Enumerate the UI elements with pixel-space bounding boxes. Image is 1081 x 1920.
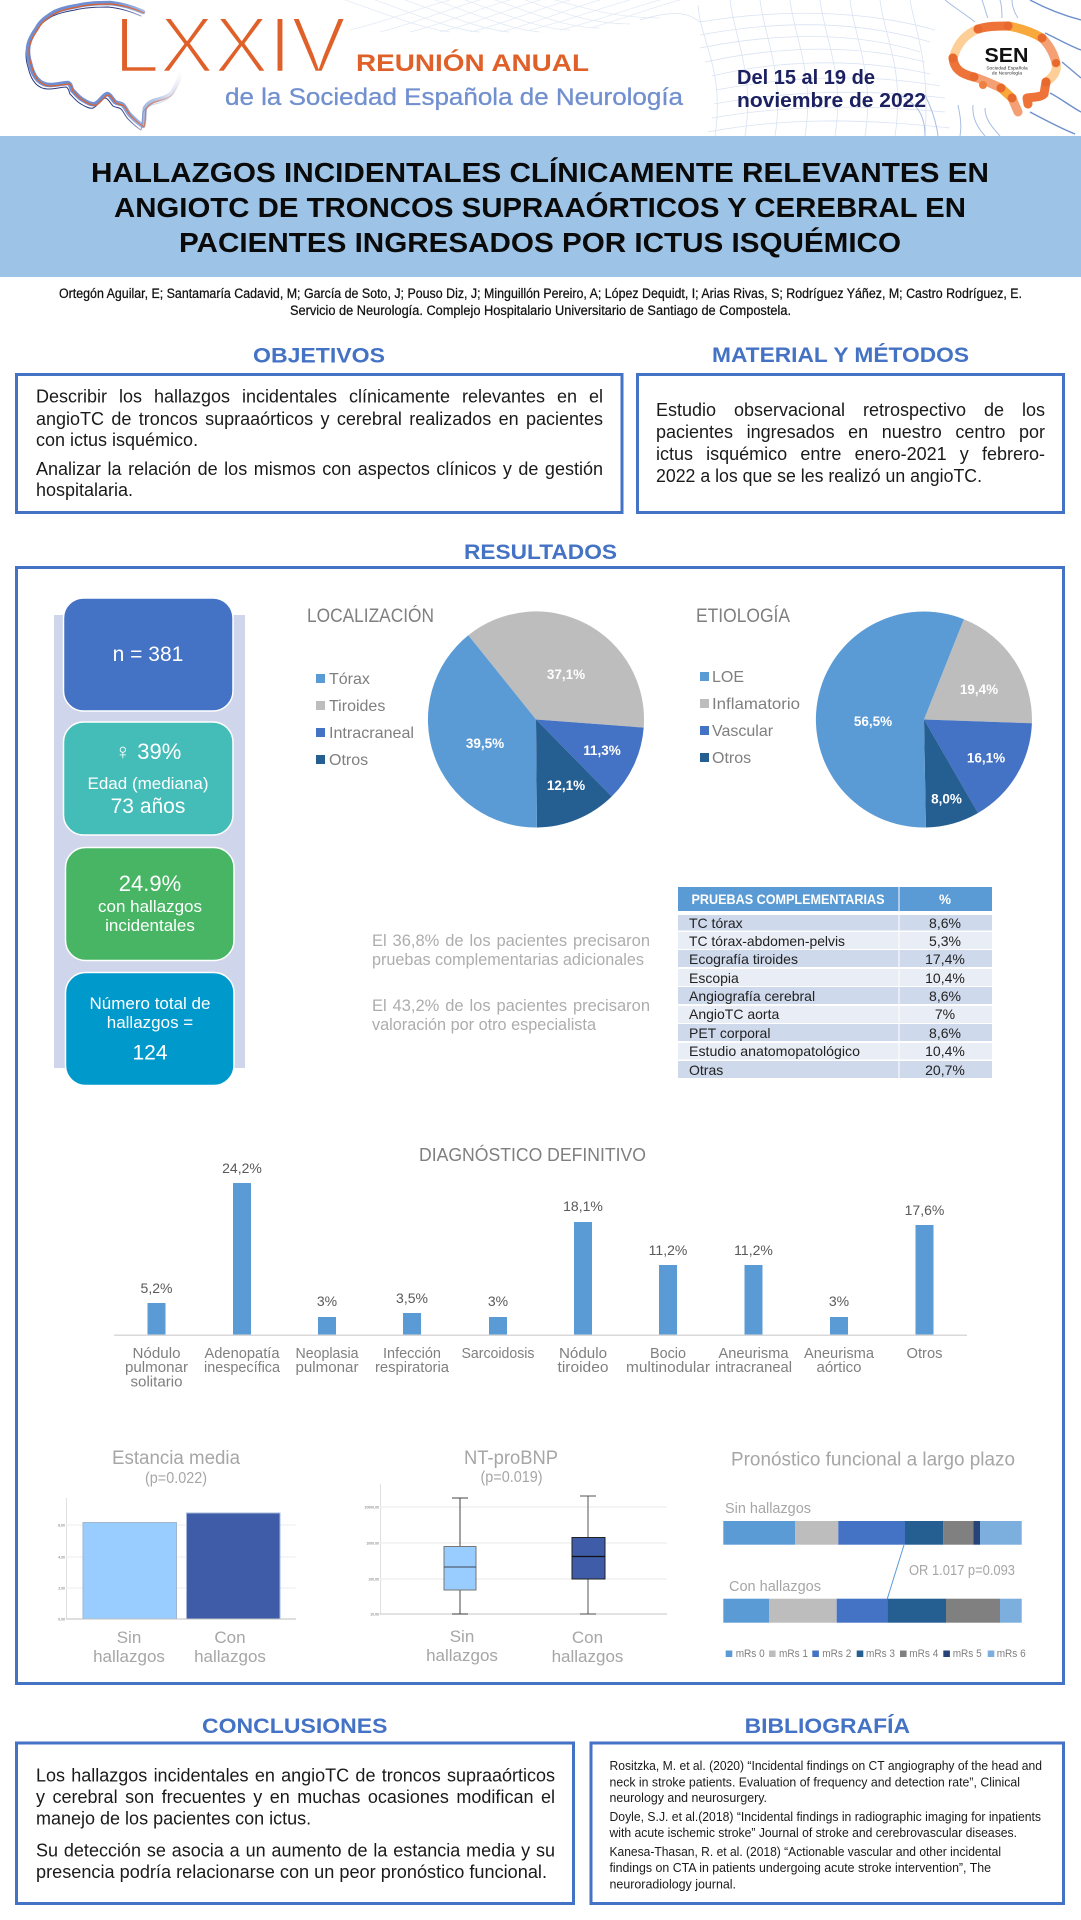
table: pruebas complementarias: Angiografía cerebral [689, 988, 815, 1004]
panel: conclusiones [16, 1743, 574, 1904]
legend: LOE [712, 669, 744, 686]
card: incidental findings rate: con hallazgos [98, 897, 202, 916]
text block: additional tests and specialist: El 43,2% de los pacientes precisaron [372, 997, 650, 1015]
category labels [93, 1628, 266, 1666]
odds ratio note: OR 1.017 p=0.093 [909, 1562, 1015, 1579]
bar category labels: Bocio [650, 1345, 686, 1362]
chart title: NT-proBNP [464, 1448, 558, 1469]
table: pruebas complementarias: TC tórax-abdomen-pelvis [689, 933, 845, 949]
bar category labels: Adenopatía [204, 1345, 280, 1362]
panel: material y métodos: ictus isquémico entre enero-2021 y febrero- [656, 444, 1045, 464]
panel: resultados [16, 568, 1064, 1684]
bar values: 18,1% [563, 1198, 603, 1214]
panel: material y métodos: Estudio observacional retrospectivo de los [656, 400, 1045, 420]
table: pruebas complementarias: AngioTC aorta [689, 1006, 779, 1022]
header banner: de Neurología [992, 70, 1022, 76]
pie values: 56,5% [854, 714, 892, 729]
chart title: LOCALIZACIÓN [307, 605, 434, 627]
legend [700, 669, 800, 767]
connector line [887, 1545, 904, 1599]
legend: Vascular [712, 723, 774, 740]
panel: bibliografía: neurology and neurosurgery. [610, 1790, 767, 1805]
panel: material y métodos: 2022 a los que se les realizó un angioTC. [656, 466, 982, 486]
card: incidental findings rate [66, 848, 234, 960]
table: pruebas complementarias: 7% [935, 1006, 955, 1022]
bar category labels: multinodular [626, 1359, 710, 1376]
bar category labels: Aneurisma [804, 1345, 875, 1362]
category labels [426, 1627, 623, 1666]
bar: con hallazgos [186, 1513, 280, 1619]
table: pruebas complementarias: 10,4% [925, 970, 965, 986]
table: pruebas complementarias: Escopia [689, 970, 739, 986]
bar category labels [125, 1345, 942, 1390]
bar values: 17,6% [905, 1202, 944, 1218]
summary cards column [54, 598, 245, 1086]
row label: con hallazgos: Con hallazgos [729, 1578, 821, 1595]
card: sex and age: ♀ 39% [115, 739, 181, 764]
bar values: 5,2% [141, 1280, 172, 1296]
heading: objetivos: OBJETIVOS [253, 344, 385, 368]
legend: Inflamatorio [712, 696, 800, 713]
authors and affiliation: Ortegón Aguilar, E; Santamaría Cadavid, M; García de Soto, J; Pouso Diz, J; Minguillón Pereiro, A; López Dequidt, I; Arias Rivas, S; Rodríguez Yáñez, M; Castro Rodríguez, E. [59, 286, 1022, 301]
bar category labels: Otros [906, 1345, 942, 1362]
chart: NT-proBNP box plot: 10000,00 [364, 1506, 379, 1510]
category labels: Con [214, 1628, 246, 1647]
bar category labels: Nódulo [132, 1345, 180, 1362]
pie values: 11,3% [583, 743, 621, 758]
category labels: Con [572, 1628, 603, 1647]
chart: NT-proBNP box plot [364, 1448, 667, 1666]
table: pruebas complementarias: 20,7% [925, 1062, 965, 1078]
title band: ANGIOTC DE TRONCOS SUPRAAÓRTICOS Y CEREBRAL EN [114, 192, 966, 223]
panel: material y métodos [638, 374, 1064, 512]
icon: brain outline [26, 3, 183, 130]
heading: conclusiones: CONCLUSIONES [202, 1715, 388, 1738]
legend: mRs 1 [779, 1648, 808, 1660]
panel: bibliografía [591, 1743, 1064, 1904]
panel: bibliografía: Doyle, S.J. et al.(2018) “Incidental findings in radiographic imaging for inpatients [610, 1809, 1041, 1824]
header banner [26, 0, 1081, 136]
bar category labels: aórtico [816, 1359, 862, 1376]
panel: objetivos: hospitalaria. [36, 480, 133, 500]
p value: (p=0.022) [145, 1470, 207, 1487]
pie values [466, 667, 621, 793]
legend: Tórax [329, 671, 370, 688]
category labels: hallazgos [552, 1647, 623, 1666]
chart: NT-proBNP box plot: 1000,00 [366, 1542, 379, 1546]
table: pruebas complementarias [678, 887, 992, 1078]
heading: bibliografía: BIBLIOGRAFÍA [745, 1715, 910, 1738]
bar values: 11,2% [734, 1242, 773, 1258]
bar category labels: Infección [383, 1345, 441, 1362]
heading: material y métodos: MATERIAL Y MÉTODOS [712, 344, 969, 367]
category labels: Sin [117, 1628, 141, 1647]
chart: estancia media [58, 1448, 296, 1666]
event dates: Del 15 al 19 de [737, 67, 875, 89]
box: con hallazgos [572, 1496, 605, 1614]
pie values: 39,5% [466, 736, 504, 751]
card: total findings: Número total de [90, 994, 210, 1013]
title band: PACIENTES INGRESADOS POR ICTUS ISQUÉMICO [179, 227, 901, 258]
legend: mRs 2 [822, 1648, 851, 1660]
row label: sin hallazgos: Sin hallazgos [725, 1500, 811, 1517]
table: pruebas complementarias: PRUEBAS COMPLEMENTARIAS [692, 892, 884, 907]
chart: estancia media: 0,00 [58, 1618, 65, 1622]
chart title: ETIOLOGÍA [696, 606, 790, 627]
category labels: hallazgos [426, 1646, 498, 1665]
table: pruebas complementarias: Estudio anatomopatológico [689, 1043, 860, 1059]
table: pruebas complementarias: % [939, 892, 951, 907]
table: pruebas complementarias: 17,4% [925, 951, 965, 967]
text block: additional tests and specialist: pruebas complementarias adicionales [372, 951, 644, 969]
panel: objetivos: Analizar la relación de los mismos con aspectos clínicos y de gestión [36, 459, 603, 479]
panel: conclusiones: Los hallazgos incidentales en angioTC de troncos supraaórticos [36, 1766, 555, 1786]
panel: objetivos: Describir los hallazgos incidentales clínicamente relevantes en el [36, 387, 603, 407]
card: sample size [64, 598, 233, 711]
chart: etiología pie [696, 606, 1032, 828]
bar values: 24,2% [222, 1160, 262, 1176]
card: total findings [66, 972, 234, 1086]
legend [726, 1648, 1026, 1660]
panel: objetivos: con ictus isquémico. [36, 430, 198, 450]
bar category labels: intracraneal [715, 1359, 792, 1376]
bar category labels: pulmonar [296, 1359, 358, 1376]
table: pruebas complementarias: 8,6% [929, 988, 961, 1004]
bar values: 3% [829, 1293, 849, 1309]
chart: estancia media: 2,00 [58, 1586, 65, 1590]
chart: NT-proBNP box plot: 100,00 [368, 1578, 379, 1582]
pie values: 19,4% [960, 682, 998, 697]
table: pruebas complementarias: Ecografía tiroides [689, 951, 798, 967]
legend [316, 671, 414, 769]
title band [0, 136, 1081, 277]
card: sex and age: Edad (mediana) [88, 774, 208, 793]
pie values: 12,1% [547, 778, 585, 793]
text block: additional tests and specialist: valoración por otro especialista [372, 1016, 597, 1034]
legend: Otros [712, 750, 751, 767]
table: pruebas complementarias: 5,3% [929, 933, 961, 949]
legend: mRs 5 [953, 1648, 982, 1660]
panel: bibliografía: with acute ischemic stroke” Journal of stroke and cerebrovascular diseases. [609, 1825, 1017, 1840]
bar values: 3% [317, 1293, 337, 1309]
bar values: 3,5% [396, 1290, 428, 1306]
pie values [854, 682, 1005, 806]
card: incidental findings rate: 24.9% [119, 871, 181, 896]
legend: mRs 4 [909, 1648, 938, 1660]
bar category labels: Sarcoidosis [462, 1345, 534, 1362]
heading: resultados: RESULTADOS [464, 541, 617, 564]
event dates: noviembre de 2022 [737, 90, 926, 112]
card: sex and age [64, 722, 233, 835]
legend: Otros [329, 752, 368, 769]
category labels: Sin [450, 1627, 474, 1646]
legend: mRs 6 [997, 1648, 1026, 1660]
table: pruebas complementarias: Otras [689, 1062, 723, 1078]
bar category labels: solitario [130, 1374, 182, 1390]
panel: objetivos: angioTC de troncos supraaórticos y cerebral realizados en pacientes [36, 409, 603, 429]
card: total findings: hallazgos = [107, 1013, 193, 1032]
panel: conclusiones: presencia podría relacionarse con un peor pronóstico funcional. [36, 1862, 547, 1882]
table: pruebas complementarias: 8,6% [929, 1025, 961, 1041]
panel: conclusiones: manejo de los pacientes con ictus. [36, 1808, 311, 1828]
bar category labels: Neoplasia [296, 1345, 359, 1362]
bar values: 11,2% [649, 1242, 687, 1258]
header banner: Sociedad Española [986, 66, 1028, 72]
chart: diagnóstico definitivo bars [114, 1144, 967, 1390]
chart title: Pronóstico funcional a largo plazo [731, 1450, 1015, 1470]
event dates [737, 67, 926, 112]
title band: HALLAZGOS INCIDENTALES CLÍNICAMENTE RELEVANTES EN [91, 157, 989, 188]
text block: additional tests and specialist [372, 932, 650, 1034]
chart: estancia media: 6,00 [58, 1524, 65, 1528]
panel: objetivos [16, 374, 622, 512]
card: sample size: n = 381 [113, 643, 183, 666]
text block: additional tests and specialist: El 36,8% de los pacientes precisaron [372, 932, 650, 950]
table: pruebas complementarias: 8,6% [929, 915, 961, 931]
icon: SEN logo [948, 22, 1060, 112]
legend: Intracraneal [329, 725, 414, 742]
card: incidental findings rate: incidentales [105, 916, 195, 935]
box: sin hallazgos [444, 1498, 476, 1614]
panel: bibliografía: Rositzka, M. et al. (2020) “Incidental findings on CT angiography of the head and [610, 1758, 1042, 1773]
panel: conclusiones: y cerebral son frecuentes y en muchas ocasiones modifican el [36, 1787, 555, 1807]
authors and affiliation: Servicio de Neurología. Complejo Hospitalario Universitario de Santiago de Compostela. [290, 303, 791, 318]
legend: mRs 3 [866, 1648, 895, 1660]
legend: Tiroides [329, 698, 385, 715]
chart title: DIAGNÓSTICO DEFINITIVO [419, 1144, 646, 1165]
stacked bar: sin hallazgos [723, 1521, 1022, 1545]
panel: bibliografía: findings on CTA in patients undergoing acute stroke intervention”, The [610, 1860, 991, 1875]
table: pruebas complementarias: 10,4% [925, 1043, 965, 1059]
panel: bibliografía: Kanesa-Thasan, R. et al. (2018) “Actionable vascular and other incidental [610, 1844, 1001, 1859]
society name: de la Sociedad Española de Neurología [225, 84, 684, 111]
panel: conclusiones: Su detección se asocia a un aumento de la estancia media y su [36, 1840, 555, 1860]
bar category labels: pulmonar [125, 1359, 188, 1376]
table: pruebas complementarias: PET corporal [689, 1025, 770, 1041]
panel: bibliografía: neck in stroke patients. Evaluation of frequency and detection rate”, Clinical [610, 1774, 1020, 1790]
legend: mRs 0 [736, 1648, 765, 1660]
bar category labels: inespecífica [204, 1359, 281, 1376]
bars [148, 1183, 934, 1335]
bar values [141, 1160, 944, 1309]
authors and affiliation [59, 286, 1022, 318]
category labels: hallazgos [194, 1647, 266, 1666]
event number: LXXIV [114, 0, 346, 89]
p value: (p=0.019) [480, 1469, 542, 1486]
chart: NT-proBNP box plot: 10,00 [370, 1612, 379, 1616]
pie slices [428, 611, 644, 828]
bar category labels: Nódulo [559, 1345, 607, 1362]
pie values: 8,0% [931, 792, 962, 806]
card: total findings: 124 [132, 1042, 168, 1064]
event name: REUNIÓN ANUAL [356, 49, 589, 77]
chart: pronóstico funcional stacked bars [723, 1450, 1026, 1660]
header banner: SEN [984, 45, 1028, 67]
card: sex and age: 73 años [111, 795, 185, 818]
bar: sin hallazgos [83, 1522, 176, 1619]
pie values: 16,1% [967, 750, 1005, 766]
chart: localización pie [307, 605, 644, 828]
panel: bibliografía: neuroradiology journal. [610, 1876, 736, 1892]
category labels: hallazgos [93, 1647, 165, 1666]
pie slices [816, 612, 1032, 828]
chart title: Estancia media [112, 1448, 240, 1469]
chart: estancia media: 4,00 [58, 1556, 65, 1560]
bar category labels: tiroideo [558, 1359, 608, 1376]
bar values: 3% [488, 1293, 508, 1309]
bar category labels: Aneurisma [718, 1345, 789, 1362]
bar category labels: respiratoria [375, 1359, 450, 1376]
table: pruebas complementarias: TC tórax [689, 915, 743, 931]
panel: material y métodos: pacientes ingresados en nuestro centro por [656, 422, 1045, 442]
pie values: 37,1% [547, 667, 585, 682]
stacked bar: con hallazgos [723, 1599, 1022, 1623]
